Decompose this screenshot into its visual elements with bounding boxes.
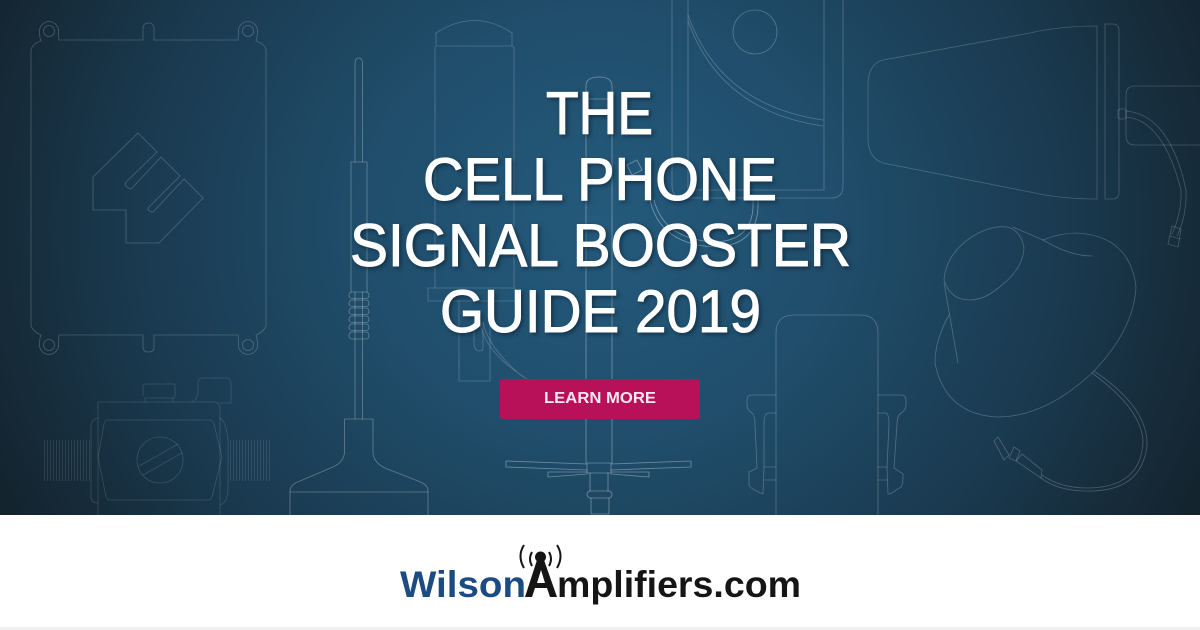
logo: WilsonAmplifiers.com — [400, 545, 801, 605]
title line 4: GUIDE 2019 — [440, 278, 761, 345]
title line 2: CELL PHONE — [423, 146, 777, 213]
icon: magnet mount antenna — [290, 58, 428, 515]
logo word: mplifiers.com: mplifiers.com — [557, 564, 801, 605]
title line 1: THE — [546, 80, 653, 147]
button: learn more — [500, 379, 700, 419]
icon: center whip antenna — [506, 77, 758, 514]
icon: signal booster unit — [31, 22, 266, 354]
logo word: Wilson: Wilson — [400, 564, 526, 605]
icon: phone with side clips — [747, 315, 906, 515]
button: learn more: LEARN MORE — [544, 390, 656, 407]
logo icon: signal waves — [520, 545, 560, 568]
icon: clamp mount — [44, 378, 271, 515]
title line 3: SIGNAL BOOSTER — [350, 212, 851, 279]
logo letter: A tower — [525, 560, 557, 597]
icon: outdoor omni antenna — [428, 20, 527, 381]
line art: product outlines — [31, 0, 1200, 515]
icon: phone cradle — [672, 0, 843, 198]
icon: panel antenna with cable — [868, 24, 1200, 247]
icon: dome antenna with cable — [935, 227, 1147, 491]
title — [350, 80, 851, 345]
footer band — [0, 515, 1200, 630]
